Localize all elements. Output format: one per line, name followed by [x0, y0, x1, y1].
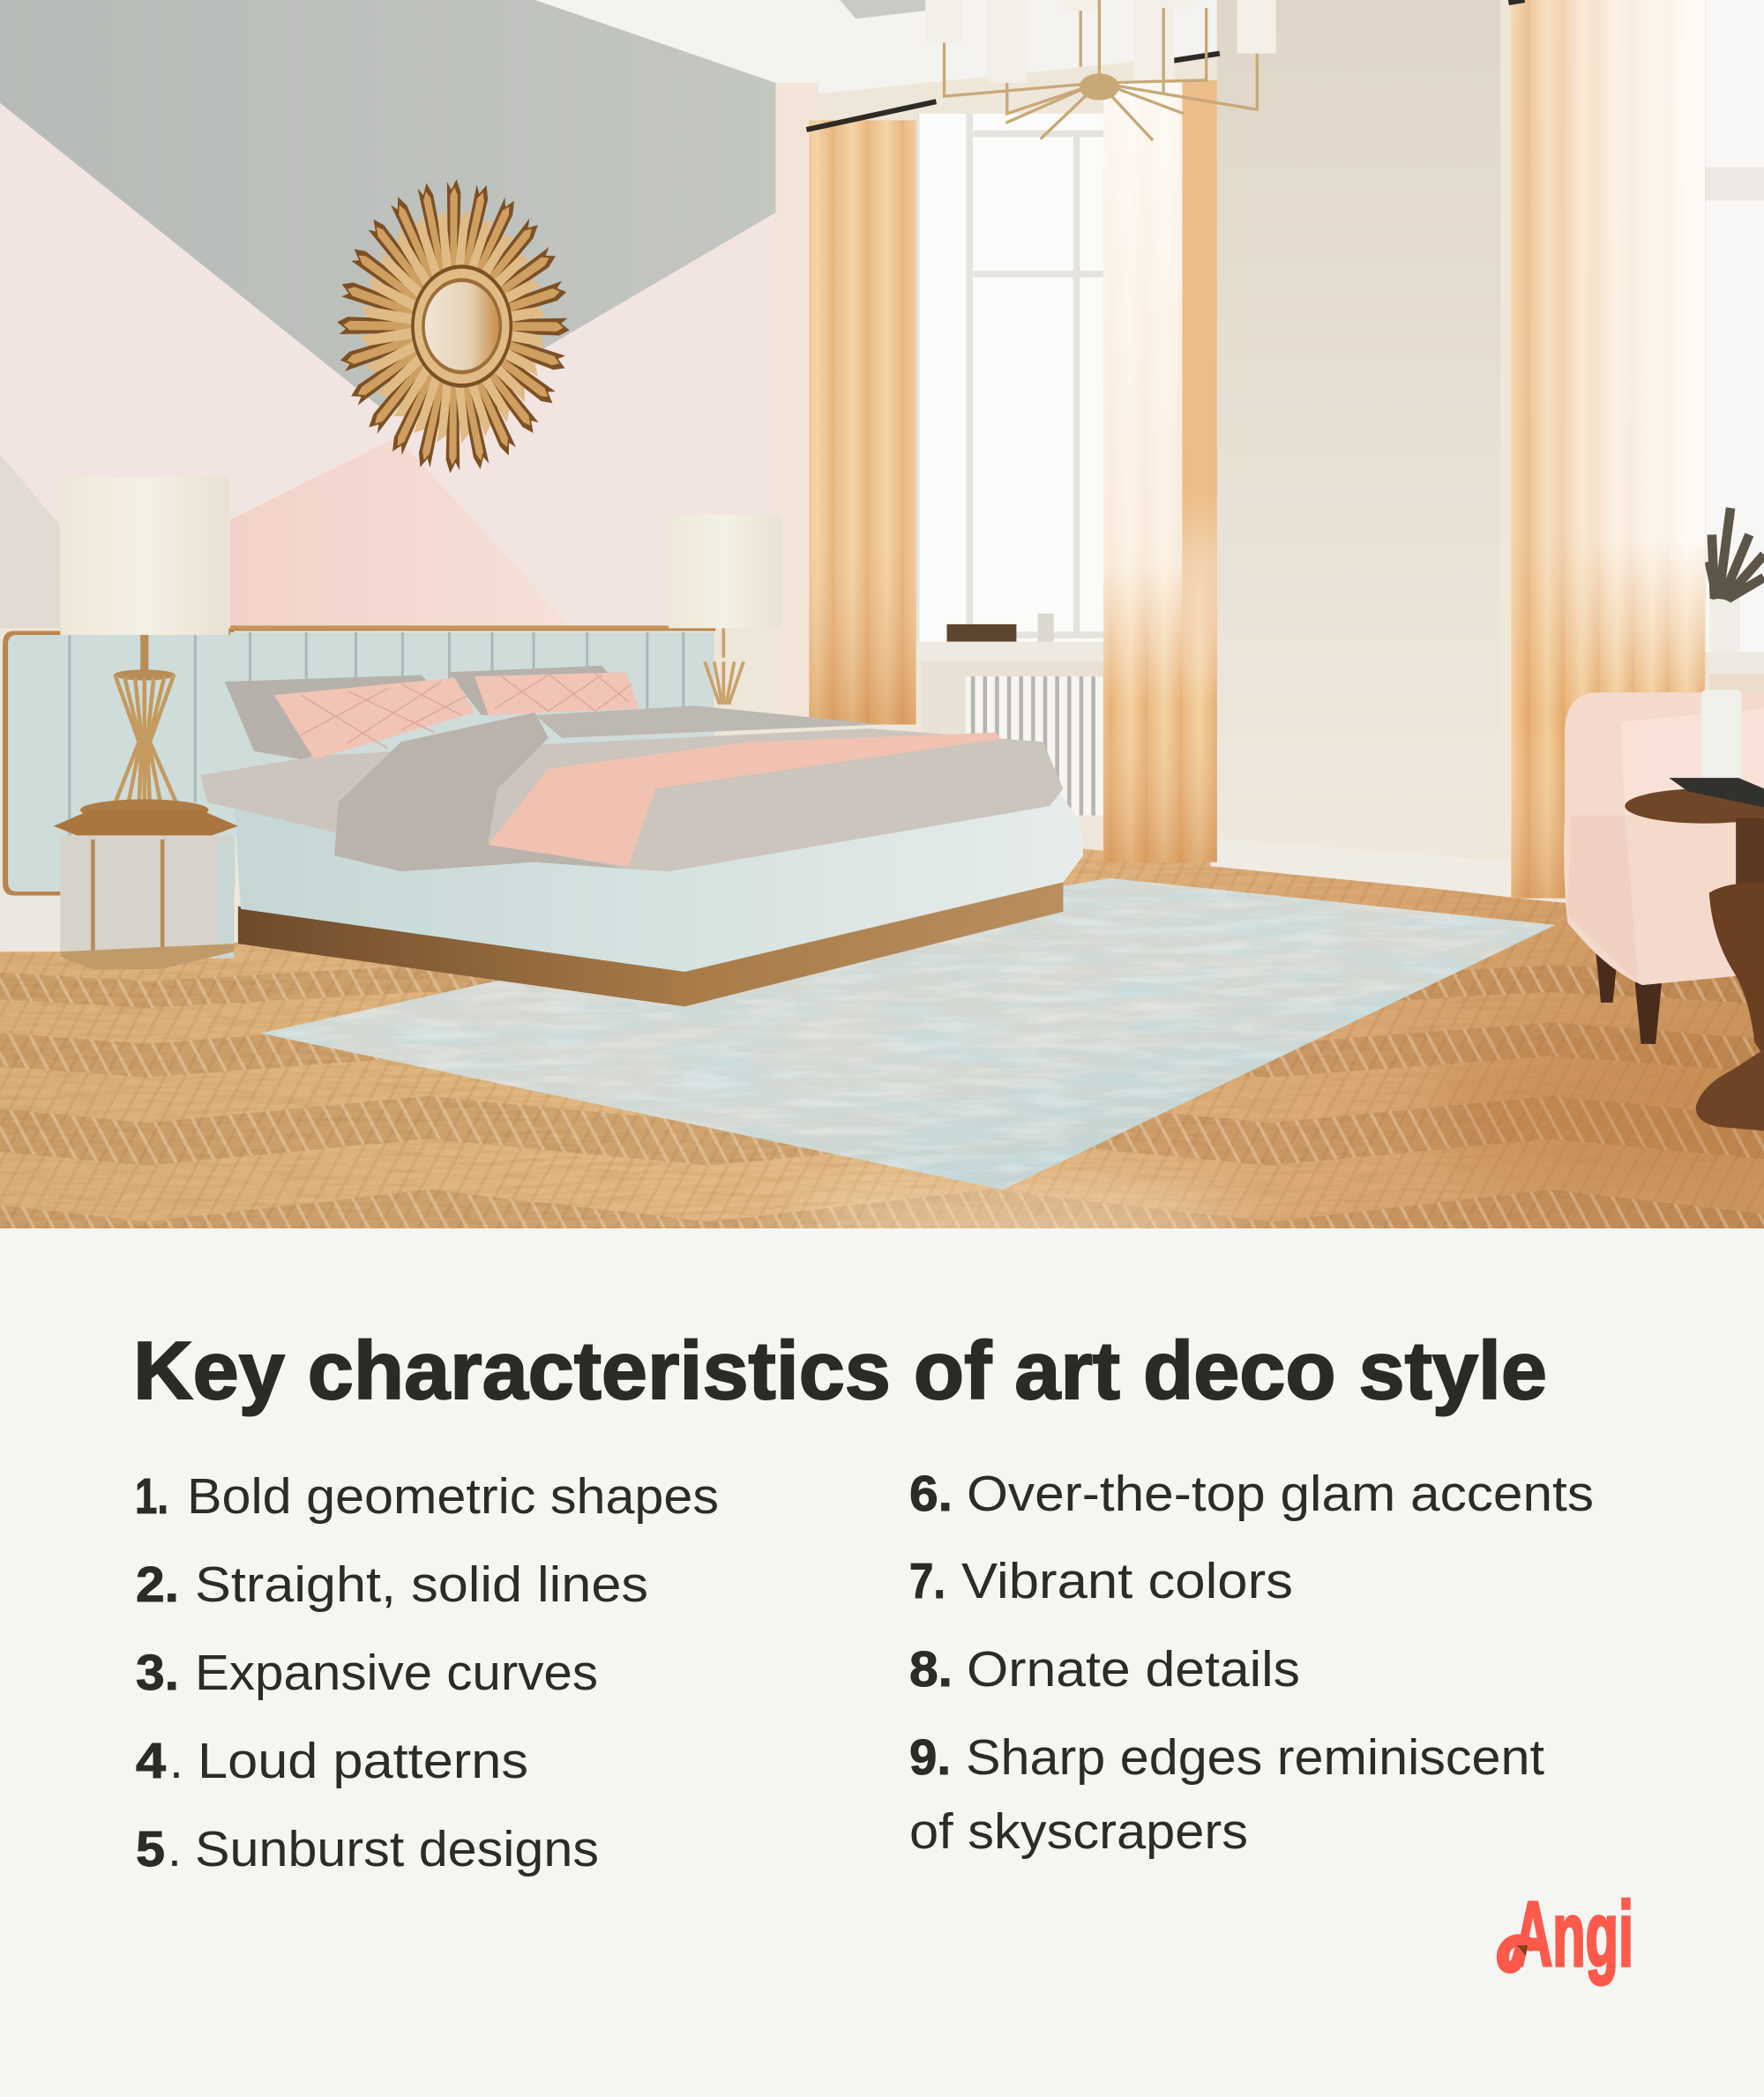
item 9 [909, 1729, 1544, 1860]
rug [254, 869, 1565, 1197]
sheets behind [535, 705, 883, 738]
potted plant [1709, 598, 1740, 653]
wall panel [1217, 0, 1514, 869]
item 4: . [169, 1733, 183, 1789]
right-hand window [1705, 0, 1764, 700]
item 3: 3. [136, 1645, 179, 1701]
item 5: . [168, 1821, 182, 1877]
pink throw [488, 733, 1000, 866]
left lamp [60, 477, 228, 821]
rumpled gray blanket [334, 713, 629, 871]
list column 1 [135, 1468, 719, 1877]
title: Key characteristics of art deco style [133, 1325, 1547, 1416]
pink pillows [274, 672, 639, 759]
left curtain [809, 120, 916, 725]
item 7: 7. [909, 1553, 946, 1609]
nightstand [54, 810, 238, 969]
right lamp [669, 515, 781, 705]
item 3: Expansive curves [195, 1645, 598, 1701]
bed plinth [238, 882, 1063, 1006]
item 6: 6. [909, 1466, 953, 1522]
gray wall section [0, 0, 775, 409]
sunburst mirror [337, 179, 570, 474]
item 6: Over-the-top glam accents [967, 1466, 1594, 1522]
left lower wall [0, 896, 60, 951]
window [916, 114, 1107, 816]
bed [200, 666, 1083, 1006]
list column 2 [909, 1466, 1594, 1860]
text section [133, 1325, 1633, 1987]
curtain rods [806, 0, 1525, 130]
baseboard [1210, 838, 1518, 897]
item 9: 9. [909, 1729, 951, 1786]
item 8: 8. [909, 1641, 953, 1698]
mattress [200, 728, 1063, 871]
tray and white vase [1701, 690, 1741, 780]
item 1: Bold geometric shapes [187, 1468, 719, 1525]
painted geometric wall [0, 0, 775, 628]
headboard [3, 625, 715, 896]
item 9: of skyscrapers [909, 1803, 1248, 1860]
armchair [1564, 692, 1764, 1044]
chandelier [925, 0, 1276, 140]
ceiling [535, 0, 1764, 93]
side table [1625, 690, 1764, 1131]
bed base [234, 788, 1083, 972]
item 1: 1. [135, 1468, 168, 1525]
radiator [966, 676, 1107, 816]
item 5: Sunburst designs [195, 1821, 599, 1877]
right curtain [1511, 0, 1705, 899]
gray pillows [225, 675, 461, 759]
photo: art deco bedroom [0, 0, 1764, 1228]
chair legs [1596, 949, 1618, 1003]
item 8: Ornate details [967, 1641, 1300, 1698]
left gray-beige wedge [0, 454, 60, 628]
books on sill [947, 624, 1016, 642]
item 9: Sharp edges reminiscent [966, 1729, 1544, 1786]
back wall [0, 0, 1764, 962]
item 2: 2. [136, 1556, 179, 1613]
item 5: 5 [136, 1821, 165, 1877]
item 4: Loud patterns [198, 1733, 528, 1789]
centre curtain [1103, 80, 1217, 862]
item 4: 4 [136, 1733, 166, 1789]
item 2: Straight, solid lines [195, 1556, 648, 1613]
item 7: Vibrant colors [961, 1553, 1293, 1609]
floor [0, 848, 1764, 1228]
wall column beside bed wall [775, 83, 818, 725]
Angi logo: Angi [1514, 1884, 1633, 1986]
Angi logo [1503, 1884, 1633, 1986]
deep pink triangle [230, 437, 572, 628]
